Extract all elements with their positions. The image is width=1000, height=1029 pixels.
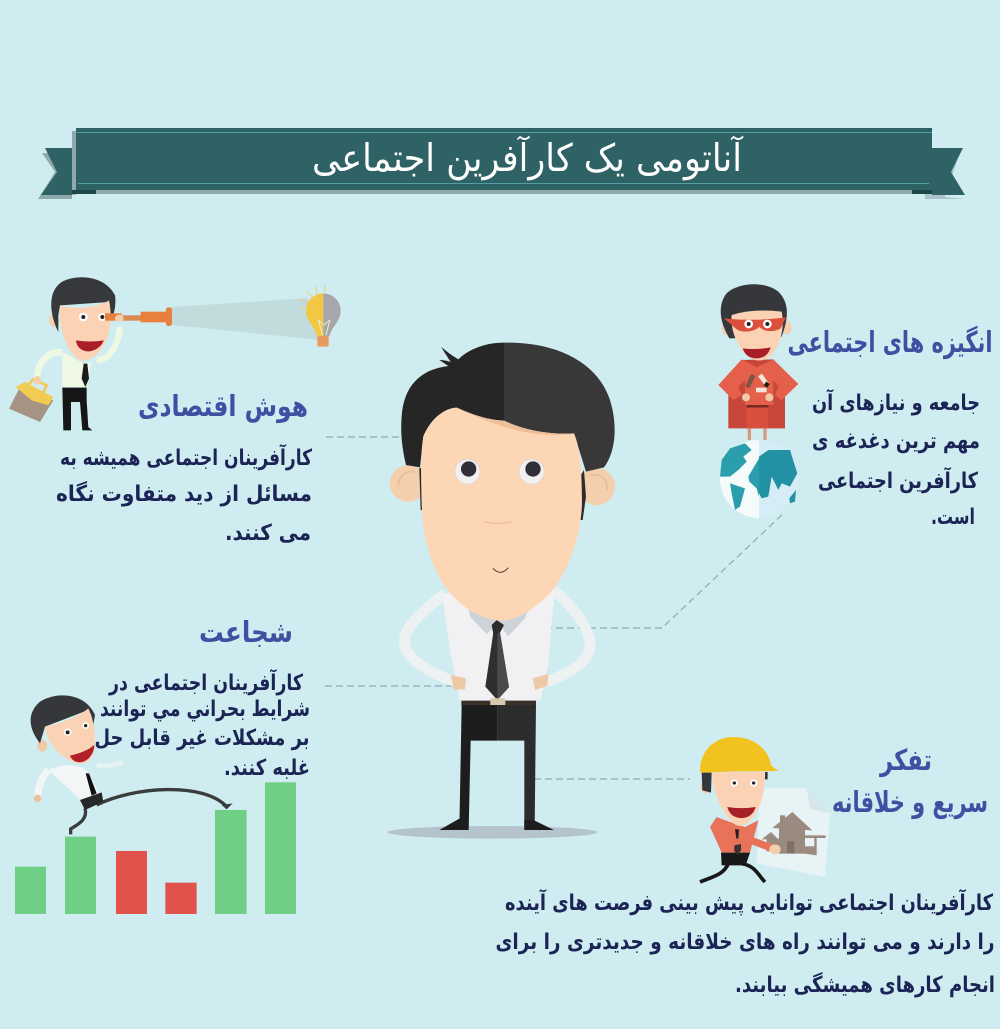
text block: courage: کارآفرینان اجتماعی در bbox=[108, 668, 303, 696]
panel: courage illustration bbox=[15, 695, 296, 914]
panel: economic intelligence illustration bbox=[9, 277, 341, 430]
hair bbox=[721, 284, 787, 338]
necktie bbox=[735, 829, 739, 839]
face bbox=[712, 771, 765, 826]
mouth bbox=[70, 745, 94, 762]
light beam bbox=[172, 298, 320, 340]
eyes bbox=[455, 459, 480, 484]
arms bbox=[404, 593, 458, 683]
face bbox=[45, 708, 95, 763]
mouth bbox=[743, 347, 771, 358]
mouth bbox=[727, 807, 756, 818]
collar bbox=[467, 602, 530, 636]
heading: quick and creative thinking bbox=[832, 743, 988, 819]
ear bbox=[37, 740, 47, 752]
fists bbox=[742, 393, 750, 401]
arms bbox=[37, 352, 62, 379]
legs bbox=[700, 864, 765, 882]
hair bbox=[702, 772, 768, 793]
heading: quick and creative thinking: تفکر bbox=[878, 743, 932, 777]
central character bbox=[387, 343, 615, 839]
connector dashed lines bbox=[325, 437, 785, 779]
arm bbox=[748, 839, 773, 849]
shirt bbox=[62, 352, 92, 387]
ears bbox=[390, 465, 615, 505]
mask bbox=[724, 317, 786, 332]
text block: economic intelligence: کارآفرینان اجتماعی همیشه به bbox=[60, 443, 312, 471]
belt and buckle bbox=[461, 701, 536, 705]
text block: courage: غلبه کنند. bbox=[224, 756, 310, 781]
text block: economic intelligence bbox=[56, 443, 312, 546]
blueprint sheet bbox=[757, 788, 830, 877]
bar chart bbox=[15, 782, 296, 914]
shirt bbox=[442, 588, 555, 701]
globe bbox=[720, 440, 798, 518]
ground shadow bbox=[387, 826, 597, 839]
hair bbox=[401, 343, 615, 520]
title banner bbox=[38, 128, 965, 199]
hair bbox=[51, 277, 115, 332]
necktie bbox=[485, 620, 509, 700]
hands bbox=[451, 675, 466, 690]
text block: quick and creative thinking bbox=[496, 888, 995, 998]
shirt bbox=[48, 765, 99, 802]
text block: courage: شرایط بحراني مي توانند bbox=[100, 697, 310, 722]
telescope bbox=[105, 307, 172, 326]
shoes bbox=[439, 818, 468, 830]
heading: courage: شجاعت bbox=[199, 615, 293, 649]
recycle emblem bbox=[747, 375, 768, 390]
cape bbox=[728, 359, 785, 428]
panel: quick creative thinking illustration bbox=[700, 737, 830, 882]
trousers bbox=[721, 853, 750, 865]
rear leg bbox=[71, 808, 86, 834]
arms bbox=[38, 770, 48, 797]
torso bbox=[710, 817, 758, 853]
waist bbox=[80, 792, 103, 810]
panel: social motivation illustration bbox=[718, 284, 798, 518]
trousers bbox=[62, 388, 92, 430]
leaping leg bbox=[97, 790, 227, 807]
face bbox=[732, 311, 783, 360]
heading: economic intelligence: هوش اقتصادی bbox=[138, 389, 308, 423]
necktie bbox=[86, 773, 97, 796]
nose and mouth bbox=[483, 522, 512, 523]
mouth bbox=[76, 340, 104, 351]
body and arms bbox=[718, 359, 798, 405]
businessman with briefcase bbox=[9, 277, 120, 430]
jumping businessman bbox=[31, 695, 123, 834]
face bbox=[421, 408, 582, 621]
house icon bbox=[762, 812, 826, 855]
belt and shorts bbox=[747, 405, 768, 408]
face bbox=[60, 300, 111, 361]
briefcase bbox=[9, 379, 53, 422]
eyes bbox=[64, 729, 71, 736]
text block: economic intelligence: مسائل از دید متفاوت نگاه bbox=[56, 480, 312, 507]
text block: courage: بر مشکلات غیر قابل حل bbox=[94, 726, 310, 751]
text block: social motivation: است. bbox=[931, 505, 975, 530]
ear bbox=[701, 781, 711, 793]
eyes bbox=[79, 313, 88, 321]
title text: آناتومی یک کارآفرین اجتماعی bbox=[312, 135, 743, 181]
text block: economic intelligence: می کنند. bbox=[225, 521, 311, 546]
necktie bbox=[82, 364, 89, 387]
text block: courage bbox=[94, 668, 310, 781]
eyes bbox=[731, 779, 738, 787]
trousers bbox=[459, 705, 498, 830]
ears bbox=[722, 322, 732, 335]
legs bbox=[748, 428, 751, 440]
light bulb bbox=[299, 285, 341, 347]
text block: social motivation bbox=[812, 388, 980, 530]
hard hat bbox=[700, 737, 778, 773]
hair bbox=[31, 695, 95, 743]
ear bbox=[49, 314, 59, 327]
